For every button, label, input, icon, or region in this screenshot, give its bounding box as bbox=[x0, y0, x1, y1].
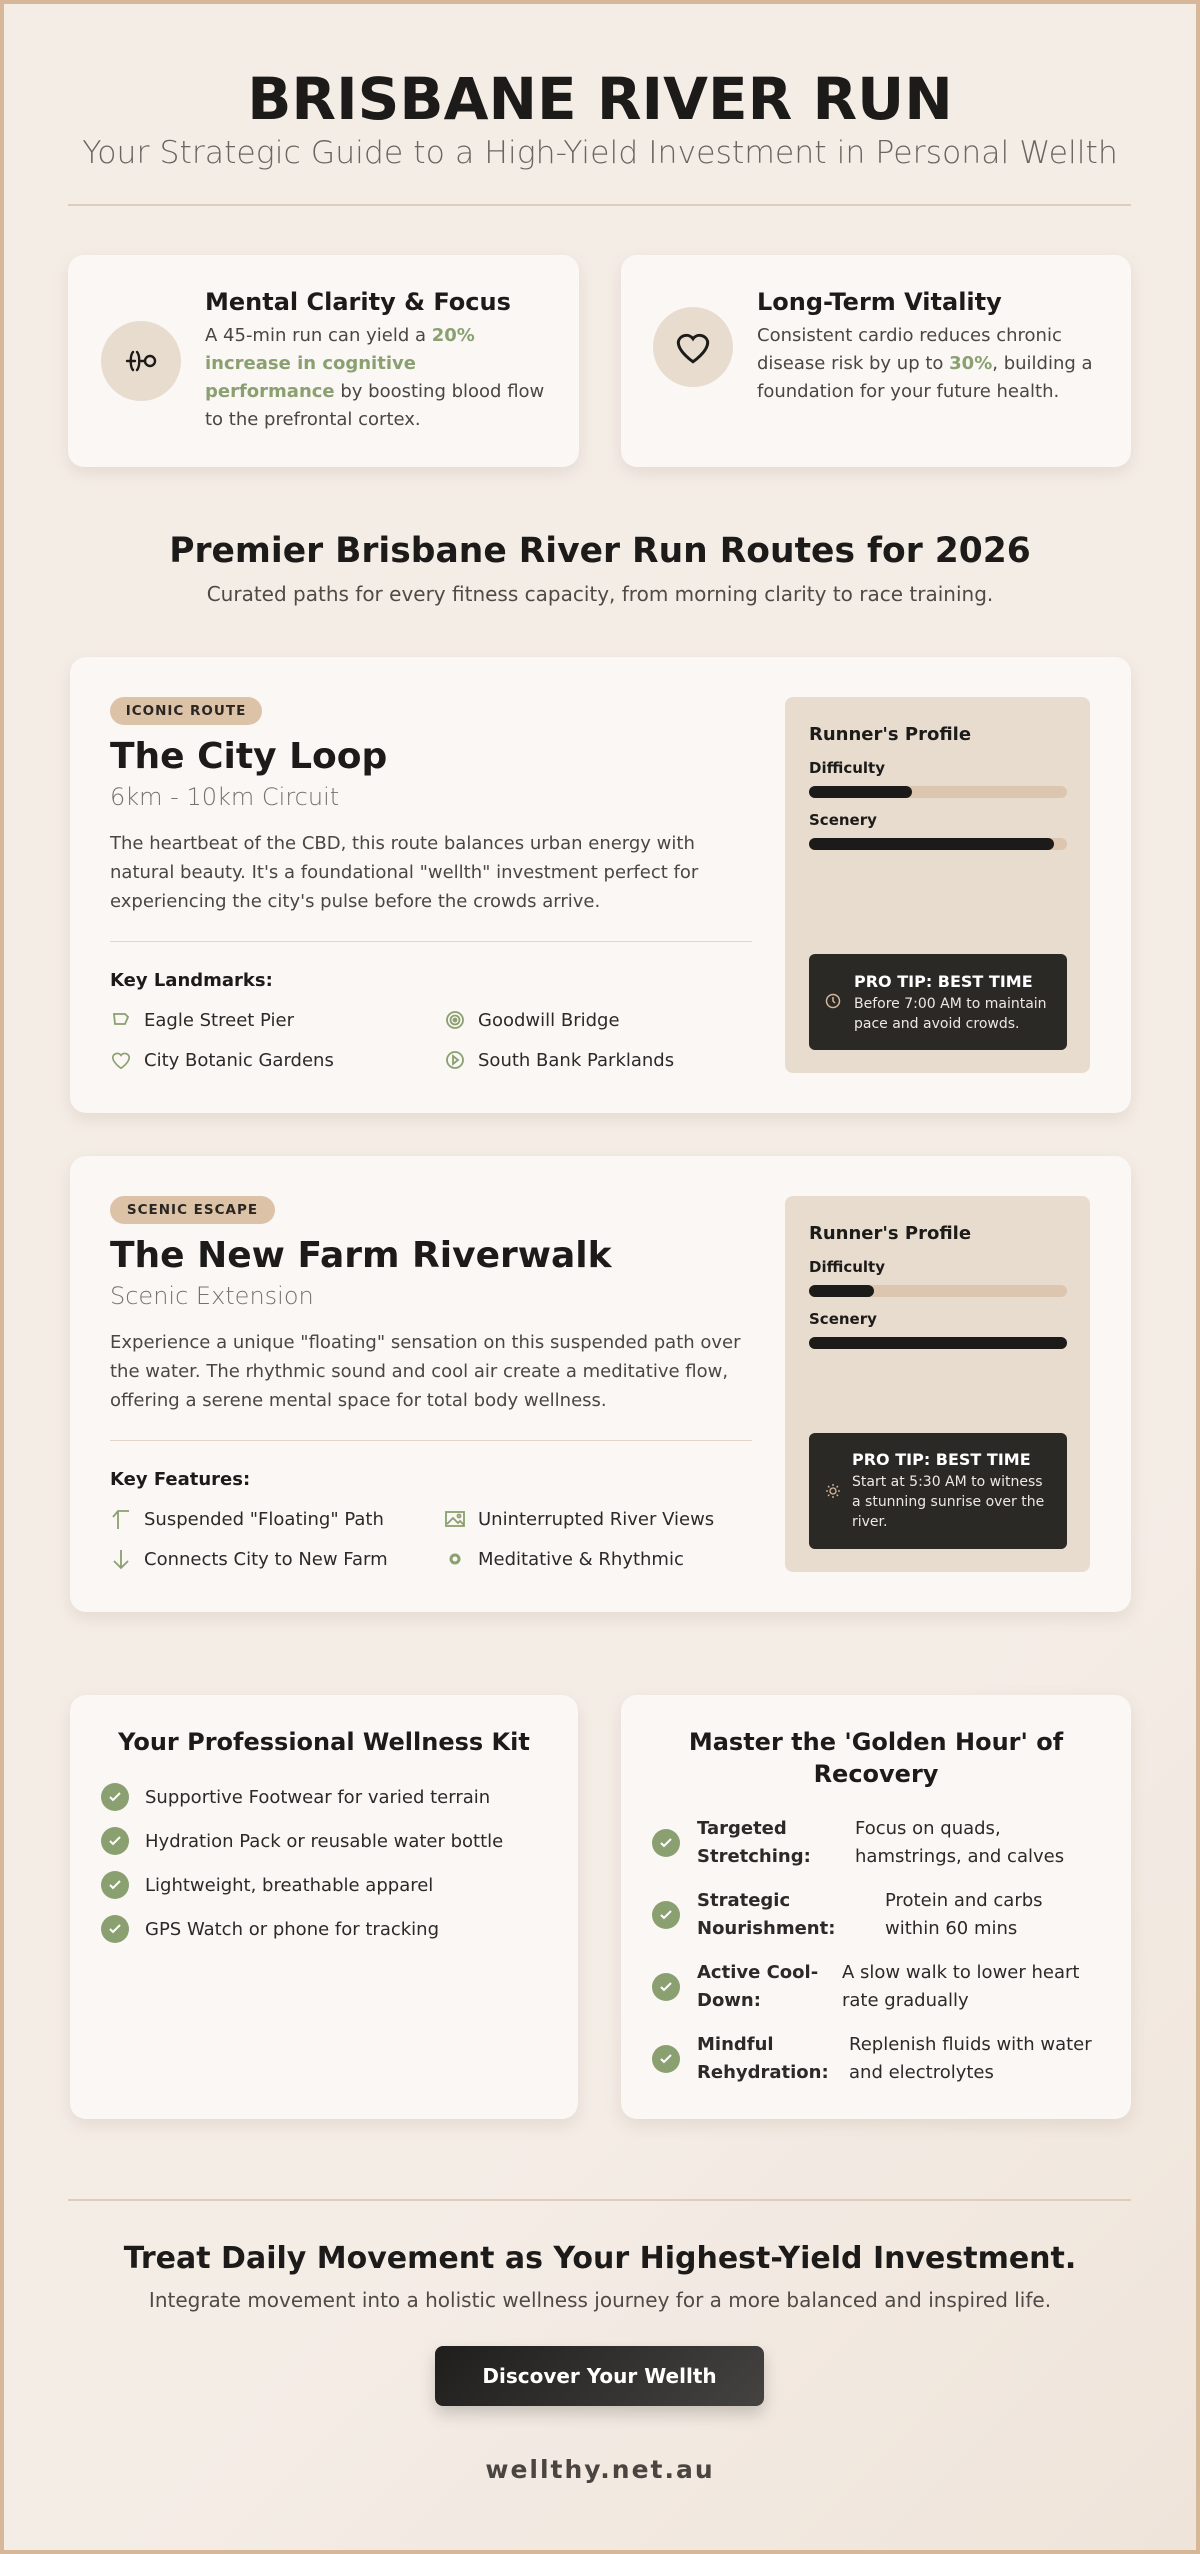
card: long-term vitality bbox=[621, 255, 1131, 467]
body text bbox=[205, 325, 544, 430]
subtitle: Your Strategic Guide to a High-Yield Investment in Personal Wellth bbox=[82, 135, 1118, 171]
description: Experience a unique "floating" sensation on this suspended path over bbox=[110, 1332, 741, 1353]
pro tip: PRO TIP: BEST TIME bbox=[854, 972, 1033, 991]
recovery item: stretching bbox=[652, 1818, 1064, 1867]
recovery item: cool-down: Active Cool- bbox=[697, 1962, 818, 1983]
title: BRISBANE RIVER RUN bbox=[247, 65, 953, 133]
feature: meditative: Meditative & Rhythmic bbox=[478, 1548, 684, 1570]
description: the water. The rhythmic sound and cool air create a meditative flow, bbox=[110, 1361, 728, 1382]
body text: increase in cognitive bbox=[205, 353, 416, 374]
feature: floating path: Suspended "Floating" Path bbox=[144, 1508, 384, 1530]
landmark: eagle street pier: Eagle Street Pier bbox=[144, 1010, 294, 1030]
body text: Consistent cardio reduces chronic bbox=[757, 325, 1062, 346]
website url: wellthy.net.au bbox=[485, 2455, 715, 2484]
recovery item: cool-down bbox=[652, 1962, 1079, 2011]
kit item: GPS Watch or phone for tracking bbox=[145, 1918, 439, 1940]
recovery item: nourishment: Strategic bbox=[697, 1890, 790, 1911]
feature: river views: Uninterrupted River Views bbox=[478, 1508, 714, 1530]
pro tip: PRO TIP: BEST TIME bbox=[852, 1450, 1031, 1469]
description: experiencing the city's pulse before the crowds arrive. bbox=[110, 891, 600, 912]
landmark list bbox=[112, 1010, 674, 1070]
difficulty bar: Difficulty bbox=[809, 759, 885, 777]
landmark: goodwill bridge: Goodwill Bridge bbox=[478, 1010, 620, 1030]
kit item bbox=[101, 1915, 439, 1943]
recovery item: rehydration: Replenish fluids with water bbox=[849, 2034, 1092, 2055]
badge bbox=[110, 1196, 275, 1224]
profile heading: Runner's Profile bbox=[809, 1223, 971, 1244]
difficulty bar bbox=[809, 759, 1067, 798]
kit item: Supportive Footwear for varied terrain bbox=[145, 1786, 490, 1808]
description bbox=[110, 833, 698, 912]
kit list bbox=[101, 1783, 503, 1943]
recovery item: rehydration: Mindful bbox=[697, 2034, 774, 2055]
heading: Mental Clarity & Focus bbox=[205, 288, 511, 316]
landmarks heading: Key Landmarks: bbox=[110, 970, 273, 991]
recovery item: cool-down: A slow walk to lower heart bbox=[842, 1962, 1079, 1983]
route subtitle: 6km - 10km Circuit bbox=[110, 783, 339, 811]
kit item: Hydration Pack or reusable water bottle bbox=[145, 1830, 503, 1852]
profile heading: Runner's Profile bbox=[809, 724, 971, 745]
recovery item: stretching: Targeted bbox=[697, 1818, 787, 1839]
difficulty bar bbox=[809, 1258, 1067, 1297]
body text bbox=[757, 325, 1093, 402]
button: Discover Your Wellth bbox=[482, 2364, 717, 2388]
kit item bbox=[101, 1871, 433, 1899]
recovery item: rehydration: Rehydration: bbox=[697, 2062, 829, 2083]
recovery heading: Recovery bbox=[814, 1760, 938, 1788]
panel: new farm riverwalk bbox=[70, 1156, 1131, 1612]
feature: connects: Connects City to New Farm bbox=[144, 1548, 388, 1570]
recovery heading: Master the 'Golden Hour' of bbox=[689, 1728, 1063, 1756]
heading: Long-Term Vitality bbox=[757, 288, 1002, 316]
recovery item: nourishment bbox=[652, 1890, 1043, 1939]
pro tip: river. bbox=[852, 1514, 887, 1530]
scenery bar: Scenery bbox=[809, 1310, 877, 1328]
route subtitle: Scenic Extension bbox=[110, 1282, 314, 1310]
recovery item: rehydration: and electrolytes bbox=[849, 2062, 994, 2083]
features heading: Key Features: bbox=[110, 1469, 250, 1490]
icon: heart bbox=[653, 307, 733, 387]
recovery item: nourishment: within 60 mins bbox=[885, 1918, 1017, 1939]
recovery heading bbox=[689, 1728, 1064, 1788]
difficulty bar: Difficulty bbox=[809, 1258, 885, 1276]
pro tip: pace and avoid crowds. bbox=[854, 1016, 1019, 1032]
recovery list bbox=[652, 1818, 1092, 2083]
body text: performance by boosting blood flow bbox=[205, 381, 544, 402]
landmark: south bank: South Bank Parklands bbox=[478, 1050, 674, 1070]
panel: city loop route bbox=[70, 657, 1131, 1113]
scenery bar bbox=[809, 811, 1067, 850]
landmark: botanic gardens: City Botanic Gardens bbox=[144, 1050, 334, 1070]
panel: golden hour recovery bbox=[621, 1695, 1131, 2119]
pro tip: Before 7:00 AM to maintain bbox=[854, 996, 1047, 1012]
badge bbox=[110, 697, 262, 725]
runner's profile panel bbox=[785, 697, 1090, 1073]
badge: ICONIC ROUTE bbox=[126, 703, 246, 719]
features list bbox=[112, 1508, 714, 1570]
pro tip: Start at 5:30 AM to witness bbox=[852, 1474, 1043, 1490]
button bbox=[435, 2346, 764, 2406]
recovery item: cool-down: rate gradually bbox=[842, 1990, 969, 2011]
scenery bar: Scenery bbox=[809, 811, 877, 829]
recovery item: stretching: Stretching: bbox=[697, 1846, 811, 1867]
icon: sun bbox=[826, 1484, 840, 1498]
kit item bbox=[101, 1783, 490, 1811]
kit item bbox=[101, 1827, 503, 1855]
description bbox=[110, 1332, 741, 1411]
icon: clock bbox=[826, 994, 840, 1008]
recovery item: stretching: Focus on quads, bbox=[855, 1818, 1001, 1839]
recovery item: rehydration bbox=[652, 2034, 1092, 2083]
section heading: Premier Brisbane River Run Routes for 2026 bbox=[169, 531, 1031, 571]
badge: SCENIC ESCAPE bbox=[127, 1202, 258, 1218]
body text: to the prefrontal cortex. bbox=[205, 409, 421, 430]
description: offering a serene mental space for total body wellness. bbox=[110, 1390, 607, 1411]
panel: wellness kit bbox=[70, 1695, 578, 2119]
closing subtitle: Integrate movement into a holistic wellness journey for a more balanced and inspired life. bbox=[149, 2288, 1051, 2312]
body text: foundation for your future health. bbox=[757, 381, 1059, 402]
runner's profile panel bbox=[785, 1196, 1090, 1572]
closing heading: Treat Daily Movement as Your Highest-Yield Investment. bbox=[124, 2241, 1076, 2276]
kit item: Lightweight, breathable apparel bbox=[145, 1874, 433, 1896]
pro tip: a stunning sunrise over the bbox=[852, 1494, 1044, 1510]
pro tip bbox=[809, 954, 1067, 1050]
section subtitle: Curated paths for every fitness capacity, from morning clarity to race training. bbox=[207, 582, 993, 606]
recovery item: nourishment: Nourishment: bbox=[697, 1918, 835, 1939]
route title: The City Loop bbox=[110, 736, 387, 777]
recovery item: cool-down: Down: bbox=[697, 1990, 761, 2011]
description: The heartbeat of the CBD, this route balances urban energy with bbox=[110, 833, 695, 854]
kit heading: Your Professional Wellness Kit bbox=[118, 1728, 530, 1756]
body text: disease risk by up to 30%, building a bbox=[757, 353, 1093, 374]
description: natural beauty. It's a foundational "wellth" investment perfect for bbox=[110, 862, 698, 883]
route title: The New Farm Riverwalk bbox=[110, 1235, 612, 1276]
card: mental clarity bbox=[68, 255, 579, 467]
scenery bar bbox=[809, 1310, 1067, 1349]
recovery item: nourishment: Protein and carbs bbox=[885, 1890, 1043, 1911]
pro tip bbox=[809, 1433, 1067, 1549]
body text: A 45-min run can yield a 20% bbox=[205, 325, 475, 346]
icon: brain/focus bbox=[101, 321, 181, 401]
recovery item: stretching: hamstrings, and calves bbox=[855, 1846, 1064, 1867]
